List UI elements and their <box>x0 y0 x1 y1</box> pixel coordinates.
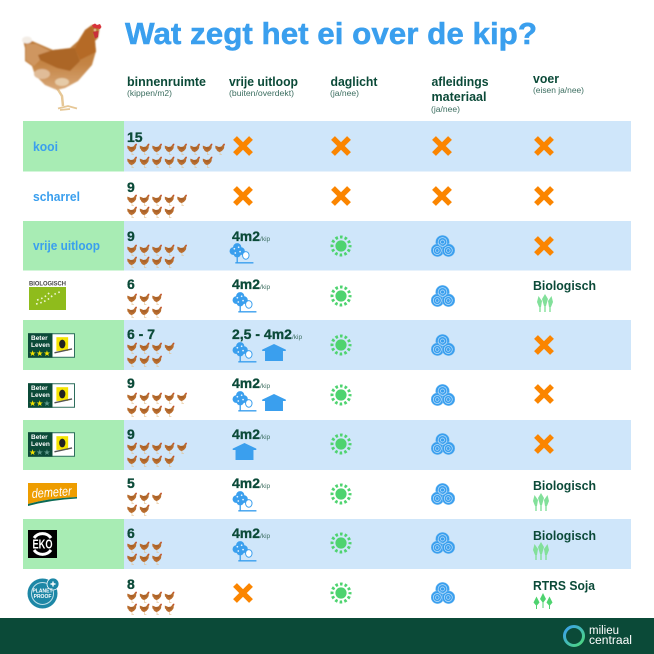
row: beter leven 2 sterren: 9 <box>127 375 135 391</box>
hens: 7 <box>127 343 174 366</box>
header: vrije uitloop: (buiten/overdekt) <box>229 89 294 98</box>
row: beter leven 1 ster: 4m2/kip <box>232 426 271 442</box>
row: demeter: Biologisch <box>533 478 596 493</box>
header: vrije uitloop: vrije uitloop <box>229 74 298 89</box>
illustration: hen <box>22 24 102 110</box>
row: scharrel: 9 <box>127 179 135 195</box>
row: vrije uitloop: 4m2/kip <box>232 228 271 244</box>
row: eko: 4m2/kip <box>232 525 271 541</box>
hens: 5 <box>127 493 162 515</box>
header: daglicht <box>330 74 378 98</box>
header: voer: voer <box>533 71 559 86</box>
header: vrije uitloop <box>229 74 298 98</box>
logo: beter leven 2 <box>28 383 75 408</box>
row: planet proof <box>28 576 596 614</box>
row: beter leven 1 ster <box>23 420 631 470</box>
row: vrije uitloop: vrije uitloop <box>33 238 100 253</box>
footer bar <box>0 618 654 654</box>
logo: beter leven 2: ★★★ <box>29 399 51 408</box>
row: vrije uitloop <box>23 221 631 270</box>
row: demeter: 4m2/kip <box>232 475 271 491</box>
logo: beter leven 1: Beter <box>31 434 48 441</box>
row: beter leven 3 sterren <box>23 320 631 370</box>
logo: milieu centraal: centraal <box>589 635 632 647</box>
logo: EKO: EKO <box>32 538 53 552</box>
hens: 6 <box>127 542 162 564</box>
row: biologisch: 4m2/kip <box>232 276 271 292</box>
logo: demeter <box>28 483 77 506</box>
row: planet proof: RTRS Soja <box>533 578 596 593</box>
logo: EU biologisch <box>29 282 66 310</box>
title: Wat zegt het ei over de kip? <box>125 16 537 51</box>
logo: beter leven 3 <box>28 333 75 358</box>
row: biologisch: 6 <box>127 276 135 292</box>
header: voer <box>533 71 584 95</box>
header: binnenruimte <box>127 74 206 98</box>
logo: beter leven 3: ★★★ <box>29 349 51 358</box>
row: eko <box>23 519 631 569</box>
row: beter leven 3 sterren: 6 - 7 <box>127 326 155 342</box>
logo: planetproof <box>28 578 59 608</box>
logo: beter leven 1 <box>28 432 75 457</box>
logo: milieu centraal: milieu <box>589 625 619 637</box>
logo: EKO <box>28 530 57 558</box>
row: kooi: 15 <box>127 129 143 145</box>
hens: 9 <box>127 393 187 416</box>
hens: 15 <box>127 144 225 167</box>
header: binnenruimte: binnenruimte <box>127 74 206 89</box>
logo: EU biologisch: BIOLOGISCH <box>29 282 66 288</box>
header: afleidings materiaal: (ja/nee) <box>431 105 460 114</box>
header: afleidings materiaal: materiaal <box>432 89 486 104</box>
header: afleidings materiaal <box>431 74 488 114</box>
row: demeter <box>28 475 596 515</box>
row: biologisch <box>29 276 596 317</box>
hens: 9 <box>127 195 187 217</box>
hens: 8 <box>127 592 174 614</box>
row: scharrel <box>33 179 552 217</box>
logo: beter leven 3: Beter <box>31 335 48 342</box>
header: daglicht: daglicht <box>330 74 378 89</box>
row: scharrel: scharrel <box>33 189 80 204</box>
row: beter leven 2 sterren: 4m2/kip <box>232 375 271 391</box>
logo: beter leven 1: Leven <box>31 441 50 448</box>
header: daglicht: (ja/nee) <box>330 89 359 98</box>
logo: demeter: demeter <box>31 483 73 501</box>
row: beter leven 3 sterren: 2,5 - 4m2/kip <box>232 326 302 342</box>
header: voer: (eisen ja/nee) <box>533 86 584 95</box>
row: eko: Biologisch <box>533 528 596 543</box>
row: kooi <box>23 121 631 172</box>
row: beter leven 2 sterren <box>28 375 552 416</box>
row: demeter: 5 <box>127 475 135 491</box>
hens: 9 <box>127 245 187 267</box>
hens: 9 <box>127 443 187 466</box>
row: kooi: kooi <box>33 139 58 154</box>
hens: 6 <box>127 294 162 317</box>
logo: beter leven 3: Leven <box>31 342 50 349</box>
logo: beter leven 2: Leven <box>31 392 50 399</box>
logo: planetproof: PROOF <box>34 594 51 600</box>
logo: beter leven 2: Beter <box>31 385 48 392</box>
logo: milieu centraal <box>564 625 632 647</box>
logo: beter leven 1: ★★★ <box>29 448 51 457</box>
row: planet proof: 8 <box>127 576 135 592</box>
row: biologisch: Biologisch <box>533 278 596 293</box>
logo: planetproof: PLANET <box>32 588 52 594</box>
row: vrije uitloop: 9 <box>127 228 135 244</box>
row: beter leven 1 ster: 9 <box>127 426 135 442</box>
header: binnenruimte: (kippen/m2) <box>127 89 172 98</box>
header: afleidings materiaal: afleidings <box>432 74 488 89</box>
column headers <box>127 71 584 114</box>
row: eko: 6 <box>127 525 135 541</box>
